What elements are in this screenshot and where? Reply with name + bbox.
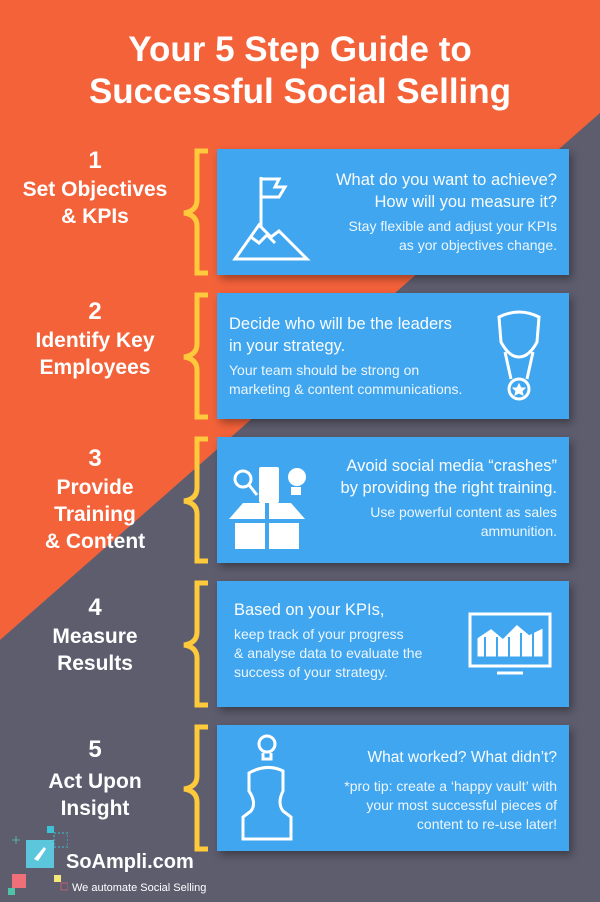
step 3 label: Training xyxy=(54,503,136,526)
panel 4: keep track of your progress xyxy=(234,626,404,642)
panel 1 xyxy=(217,149,569,275)
step 4 label: 4 xyxy=(88,594,102,621)
step 2 label: Employees xyxy=(40,356,150,379)
panel 3: Use powerful content as sales xyxy=(370,504,557,520)
panel 4: Based on your KPIs, xyxy=(234,601,384,619)
panel 5: content to re-use later! xyxy=(417,816,557,832)
icon: head with bulb xyxy=(242,734,292,840)
panel 1: Stay flexible and adjust your KPIs xyxy=(348,218,557,234)
panel 5 xyxy=(217,725,569,851)
title: Successful Social Selling xyxy=(89,72,511,111)
logo: We automate Social Selling xyxy=(72,882,206,894)
panel 1: How will you measure it? xyxy=(375,193,557,211)
step 3 label xyxy=(45,445,145,553)
step 2 label xyxy=(35,298,155,379)
panel 4: success of your strategy. xyxy=(234,664,388,680)
logo xyxy=(8,826,206,895)
logo text: SoAmpli.com xyxy=(66,851,194,873)
panel 2: marketing & content communications. xyxy=(229,381,462,397)
panel 3 xyxy=(217,437,569,563)
panel 5: *pro tip: create a ‘happy vault’ with xyxy=(344,778,557,794)
panel 1: What do you want to achieve? xyxy=(336,171,557,189)
step 5 label: Act Upon xyxy=(48,770,142,793)
title: Your 5 Step Guide to xyxy=(128,30,472,69)
panel 2: in your strategy. xyxy=(229,337,345,355)
step 1 label: 1 xyxy=(88,147,102,174)
panel 3: ammunition. xyxy=(481,523,557,539)
panel 3: Avoid social media “crashes” xyxy=(346,457,557,475)
step 5 label: 5 xyxy=(88,736,102,763)
panel 4 xyxy=(217,581,569,707)
step 4 label xyxy=(52,594,138,675)
icon: monitor chart xyxy=(468,612,552,674)
panel 5: your most successful pieces of xyxy=(366,797,557,813)
panel 2: Decide who will be the leaders xyxy=(229,315,452,333)
icon: box with ideas xyxy=(229,467,306,549)
panel 2 xyxy=(217,293,569,419)
panel 5: What worked? What didn’t? xyxy=(367,749,557,766)
step 2 label: 2 xyxy=(88,298,102,325)
panel 3: by providing the right training. xyxy=(341,479,557,497)
step 5 label: Insight xyxy=(61,797,129,820)
step 4 label: Results xyxy=(57,652,133,675)
step 3 label: Provide xyxy=(56,476,134,499)
icon: person medal xyxy=(497,310,541,400)
panel 1: as yor objectives change. xyxy=(399,237,557,253)
step 3 label: & Content xyxy=(45,530,145,553)
step 5 label xyxy=(48,736,142,820)
step 4 label: Measure xyxy=(52,625,138,648)
step 1 label xyxy=(23,147,167,228)
panel 4: & analyse data to evaluate the xyxy=(234,645,422,661)
panel 2: Your team should be strong on xyxy=(229,362,419,378)
step 2 label: Identify Key xyxy=(35,329,155,352)
step 3 label: 3 xyxy=(88,445,102,472)
icon: flag mountain xyxy=(232,177,310,260)
title xyxy=(89,30,511,111)
step 1 label: & KPIs xyxy=(61,205,129,228)
step 1 label: Set Objectives xyxy=(23,178,167,201)
